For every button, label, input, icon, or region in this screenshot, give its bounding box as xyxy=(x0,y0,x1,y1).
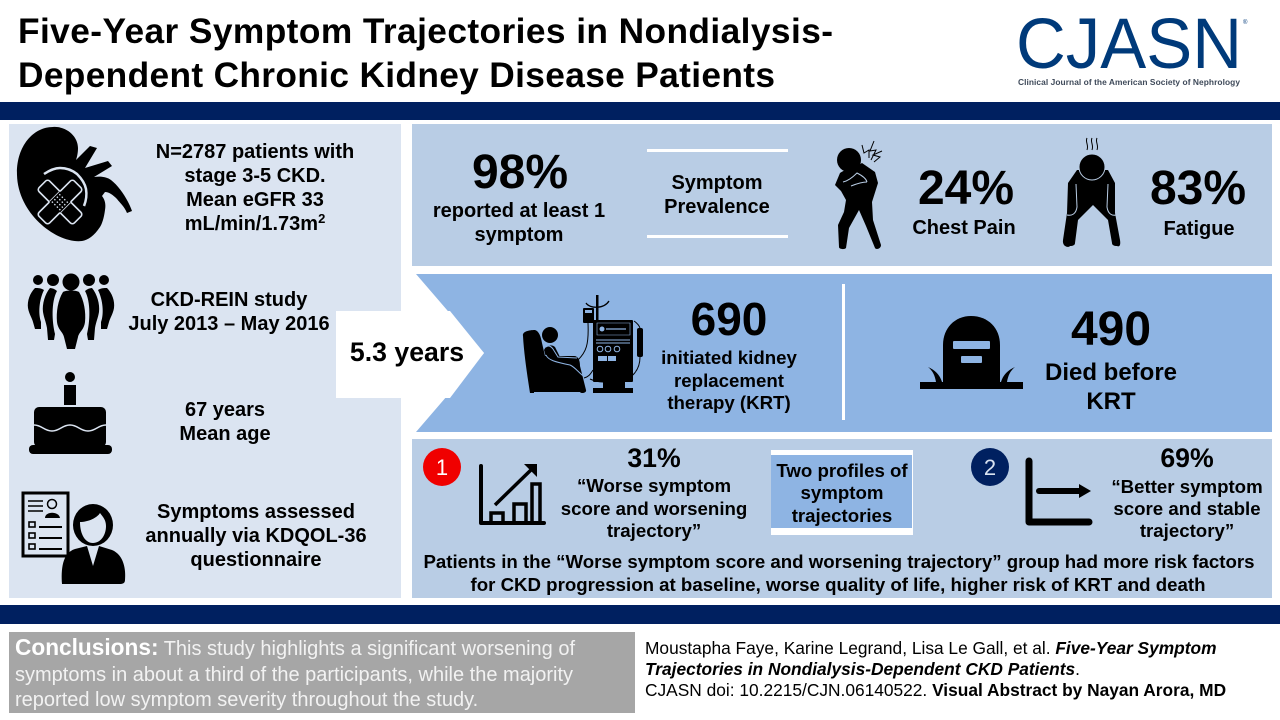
text: profile 1: 31% xyxy=(627,443,681,473)
text: profile 2: trajectory” xyxy=(1140,520,1234,541)
text: profile 1 xyxy=(561,443,747,541)
text: finding xyxy=(423,551,1255,595)
stat: 690 KRT xyxy=(661,293,798,413)
stat: fatigue: 83% xyxy=(1150,162,1246,215)
logo: CJASN: ® xyxy=(1243,19,1248,26)
title xyxy=(18,12,833,95)
logo: CJASN: CJASN xyxy=(1016,5,1242,84)
text: profile 2: “Better symptom xyxy=(1111,476,1263,497)
arrow: 5.3 years follow-up: 5.3 years xyxy=(350,337,464,367)
text: cohort: 2 xyxy=(318,211,325,226)
title: Dependent Chronic Kidney Disease Patients xyxy=(18,56,775,95)
text: study: CKD-REIN study xyxy=(151,289,308,311)
panel: symptom prevalence xyxy=(412,124,1272,266)
citation: Trajectories in Nondialysis-Dependent CKD Patients. xyxy=(645,659,1080,679)
stat: 98 percent: symptom xyxy=(475,224,563,246)
stat: 690 KRT: replacement xyxy=(674,370,784,391)
stat: 98 percent xyxy=(433,146,605,246)
text: cohort: stage 3-5 CKD. xyxy=(184,165,326,187)
citation: CJASN doi: 10.2215/CJN.06140522. Visual Abstract by Nayan Arora, MD xyxy=(645,680,1226,700)
text: profile 1: score and worsening xyxy=(561,498,747,519)
stat: 690 KRT: initiated kidney xyxy=(661,347,798,368)
icon: fatigue figure xyxy=(1063,138,1120,247)
icon: stable chart xyxy=(1029,461,1091,522)
stat: chest pain: Chest Pain xyxy=(912,217,1016,239)
stat: chest pain: 24% xyxy=(918,162,1014,215)
icon: kidney with bandage xyxy=(17,127,132,241)
heading: symptom prevalence xyxy=(647,149,788,238)
badge 2 xyxy=(971,448,1009,486)
citation: Moustapha Faye, Karine Legrand, Lisa Le Gall, et al. Five-Year Symptom xyxy=(645,638,1216,658)
bottom navy band xyxy=(0,605,1280,624)
citation xyxy=(645,638,1226,700)
stat: 690 KRT: 690 xyxy=(691,293,767,345)
text: age xyxy=(179,399,271,445)
badge 1 xyxy=(423,448,461,486)
arrow: 5.3 years follow-up xyxy=(336,311,484,398)
text: cohort: N=2787 patients with xyxy=(156,141,354,163)
title: Five-Year Symptom Trajectories in Nondialysis- xyxy=(18,12,833,51)
text: assessment: annually via KDQOL-36 xyxy=(145,525,367,547)
text: age: 67 years xyxy=(185,399,265,421)
panel: conclusions: symptoms in about a third of the participants, while the majority xyxy=(15,664,573,686)
badge 1: 1 xyxy=(436,455,448,480)
heading: symptom prevalence: Prevalence xyxy=(664,196,770,218)
icon: tombstone xyxy=(920,316,1023,389)
stat: chest pain xyxy=(912,162,1016,239)
panel: study population xyxy=(9,124,401,598)
stat: 98 percent: reported at least 1 xyxy=(433,200,605,222)
panel: outcomes chevron xyxy=(416,274,1272,432)
text: study xyxy=(128,289,330,335)
stat: 490 died: KRT xyxy=(1086,388,1136,415)
box: two profiles xyxy=(771,450,913,535)
stat: 98 percent: 98% xyxy=(472,146,568,199)
stat: 690 KRT: therapy (KRT) xyxy=(667,392,791,413)
text: cohort: mL/min/1.73m xyxy=(185,213,318,235)
text: profile 2: score and stable xyxy=(1113,498,1261,519)
badge 2: 2 xyxy=(984,455,996,480)
text: study: July 2013 – May 2016 xyxy=(128,313,330,335)
text: assessment: questionnaire xyxy=(190,549,322,571)
text: profile 2 xyxy=(1111,443,1263,541)
text: finding: for CKD progression at baseline, worse quality of life, higher risk of KRT and death xyxy=(471,574,1205,595)
text: finding: Patients in the “Worse symptom score and worsening trajectory” group had more risk factors xyxy=(423,551,1255,572)
stat: fatigue xyxy=(1150,162,1246,240)
icon: rising chart xyxy=(481,464,544,523)
icon: birthday cake xyxy=(29,372,112,454)
stat: 490 died xyxy=(1045,303,1177,415)
box: two profiles: symptom xyxy=(801,482,883,503)
stat: 490 died: 490 xyxy=(1071,303,1151,356)
panel: symptom trajectory profiles xyxy=(412,439,1272,598)
text: cohort xyxy=(156,141,354,235)
box: two profiles: trajectories xyxy=(792,505,892,526)
text: profile 2: 69% xyxy=(1160,443,1214,473)
text: profile 1: trajectory” xyxy=(607,520,701,541)
stat: 490 died: Died before xyxy=(1045,359,1177,386)
text: assessment: Symptoms assessed xyxy=(157,501,355,523)
panel: conclusions: Conclusions: This study highlights a significant worsening of xyxy=(15,634,575,660)
heading: symptom prevalence: Symptom xyxy=(671,172,763,194)
icon: dialysis patient and machine xyxy=(523,295,643,393)
text: assessment xyxy=(145,501,367,571)
icon: chest pain figure xyxy=(835,141,882,249)
text: age: Mean age xyxy=(179,423,271,445)
icon: group of people xyxy=(28,274,114,349)
top navy band xyxy=(0,102,1280,120)
panel: conclusions xyxy=(9,632,635,713)
icon: questionnaire and person xyxy=(23,493,125,584)
text: profile 1: “Worse symptom xyxy=(577,475,731,496)
logo: CJASN: Clinical Journal of the American Society of Nephrology xyxy=(1018,77,1240,87)
text: cohort: Mean eGFR 33 xyxy=(186,189,324,211)
stat: fatigue: Fatigue xyxy=(1163,218,1235,240)
panel: conclusions: reported low symptom severity throughout the study. xyxy=(15,689,478,711)
box: two profiles: Two profiles of xyxy=(776,460,908,481)
